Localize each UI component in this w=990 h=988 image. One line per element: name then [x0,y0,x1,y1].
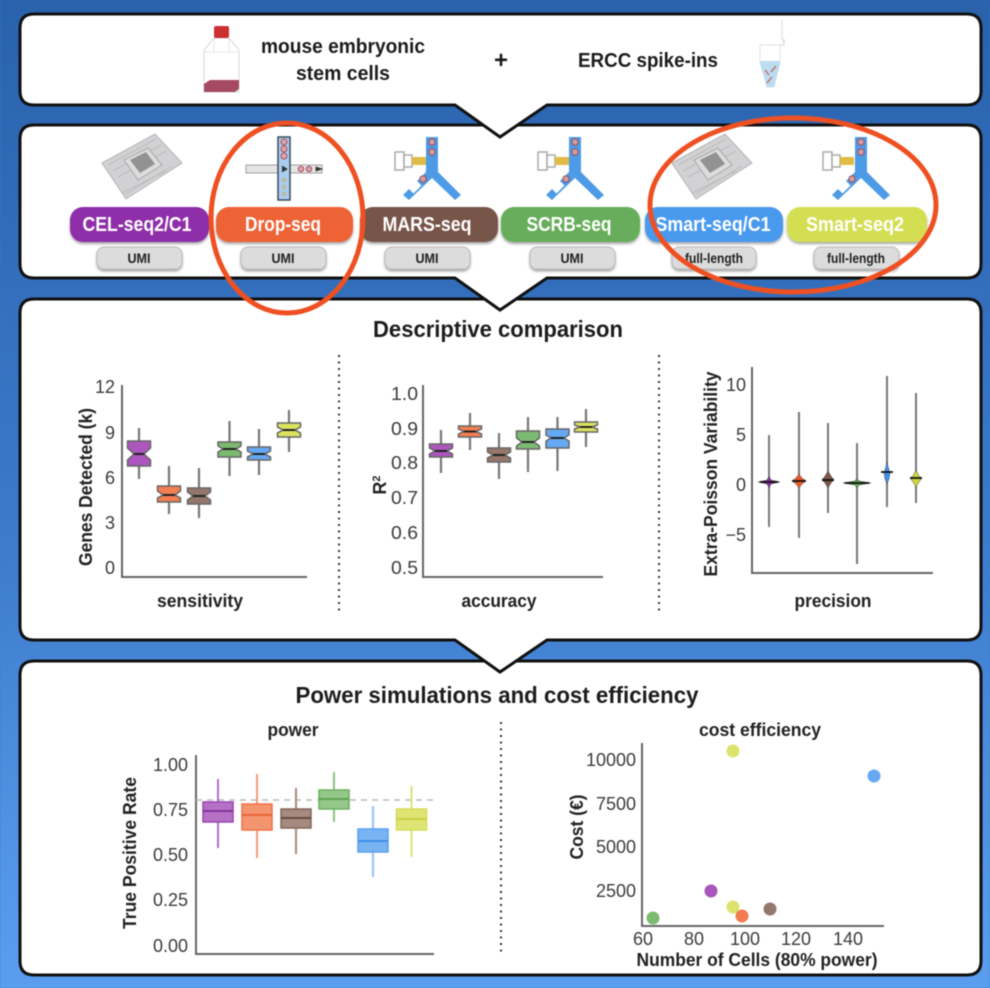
chart: precision violin plot [725,367,933,573]
chart: precision violin plot: 0 [736,475,746,495]
icon: Drop-seq microfluidic cross [246,137,322,200]
method: Smart-seq2: Smart-seq2 [806,214,904,236]
axis label: sensitivity: sensitivity [157,591,243,611]
chart: accuracy boxplot [391,384,603,578]
chart: cost efficiency scatter: 5000 [596,837,636,857]
method: Smart-seq/C1: full-length [685,250,743,266]
chart: cost efficiency scatter: 7500 [596,794,636,814]
chart: cost efficiency scatter: 100 [730,929,760,949]
method: Drop-seq: Drop-seq [245,214,321,236]
chart: sensitivity boxplot: 0 [105,558,115,578]
method: Smart-seq2 [787,207,927,269]
chart: cost efficiency scatter: 60 [633,929,653,949]
chart: power boxplot [153,755,434,956]
highlight ellipse: Drop-seq [211,123,363,313]
axis label: Cost: Cost (€) [567,794,587,860]
method: Smart-seq2: full-length [827,250,885,266]
panel: power simulations and cost efficiency [20,661,981,975]
method: Drop-seq: UMI [272,250,294,266]
method: SCRB-seq: UMI [560,250,584,266]
axis label: R squared: 2 [371,475,383,482]
axis label: True Positive Rate: True Positive Rate [120,777,140,929]
text: mouse embryonic stem cells: mouse embryonic [261,36,425,58]
chart: power boxplot: 1.00 [153,755,188,775]
heading: power simulations and cost efficiency: Power simulations and cost efficiency [296,682,699,708]
chart: sensitivity boxplot [95,377,307,578]
chart: cost efficiency scatter [586,743,884,949]
method: MARS-seq: UMI [416,250,438,266]
chart: precision violin plot: 5 [736,425,746,445]
chart: sensitivity boxplot: 3 [105,513,115,533]
axis label: Genes Detected: Genes Detected (k) [76,408,96,566]
chart: cost efficiency scatter: 80 [684,929,704,949]
icon: culture flask [204,26,239,92]
panel: input material [20,14,981,137]
method: Smart-seq/C1: Smart-seq/C1 [656,214,770,236]
icon: SCRB-seq plate and tube [538,137,604,200]
method: CEL-seq2/C1: UMI [128,250,150,266]
icon: Smart-seq2 plate and tube [823,137,890,200]
method: CEL-seq2/C1: CEL-seq2/C1 [82,214,192,236]
chart: power boxplot: 0.75 [153,800,188,820]
chart: cost efficiency scatter: 140 [833,929,863,949]
chart: precision violin plot: −5 [725,525,746,545]
text: mouse embryonic stem cells [261,36,425,85]
chart: sensitivity boxplot: 12 [95,377,115,397]
chart: accuracy boxplot: 0.5 [391,558,418,578]
icon: MARS-seq plate and tube [395,137,461,200]
chart: cost efficiency scatter: 10000 [586,750,636,770]
plus sign: + [494,47,508,74]
highlight ellipse: Smart-seq methods [650,118,936,292]
axis label: precision: precision [794,591,872,611]
icon: C1 chip 2 [672,134,752,199]
chart: power boxplot: 0.50 [153,845,188,865]
chart: sensitivity boxplot: 9 [105,423,115,443]
method: SCRB-seq: SCRB-seq [526,214,612,236]
chart: accuracy boxplot: 0.6 [391,523,418,543]
axis label: accuracy: accuracy [462,591,536,611]
panel: scRNA-seq methods [20,125,981,310]
chart: power boxplot: 0.00 [153,936,188,956]
subheading: power: power [268,720,318,740]
chart: power boxplot: 0.25 [153,890,188,910]
method: CEL-seq2/C1 [70,207,209,269]
method: SCRB-seq [501,207,640,269]
chart: cost efficiency scatter: 120 [781,929,811,949]
chart: accuracy boxplot: 0.7 [391,488,418,508]
text: ERCC spike-ins: ERCC spike-ins [578,50,718,72]
axis label: Extra-Poisson Variability: Extra-Poisson Variability [701,372,721,576]
chart: accuracy boxplot: 0.8 [391,453,418,473]
axis label: Number of Cells: Number of Cells (80% power) [636,950,878,970]
icon: spike-in tube [760,20,784,87]
heading: descriptive comparison: Descriptive comparison [373,316,623,342]
chart: accuracy boxplot: 1.0 [391,384,418,404]
axis label: R squared: R [370,482,390,495]
method: Smart-seq/C1 [645,207,783,269]
icon: C1 chip 1 [102,134,182,199]
chart: precision violin plot: 10 [726,375,746,395]
panel: descriptive comparison [20,299,981,672]
chart: accuracy boxplot: 0.9 [391,419,418,439]
method: MARS-seq: MARS-seq [382,214,472,236]
chart: cost efficiency scatter: 2500 [596,881,636,901]
method: Drop-seq [216,207,353,269]
chart: sensitivity boxplot: 6 [105,468,115,488]
subheading: cost efficiency: cost efficiency [699,720,821,740]
method: MARS-seq [360,207,498,269]
text: mouse embryonic stem cells: stem cells [296,63,390,85]
